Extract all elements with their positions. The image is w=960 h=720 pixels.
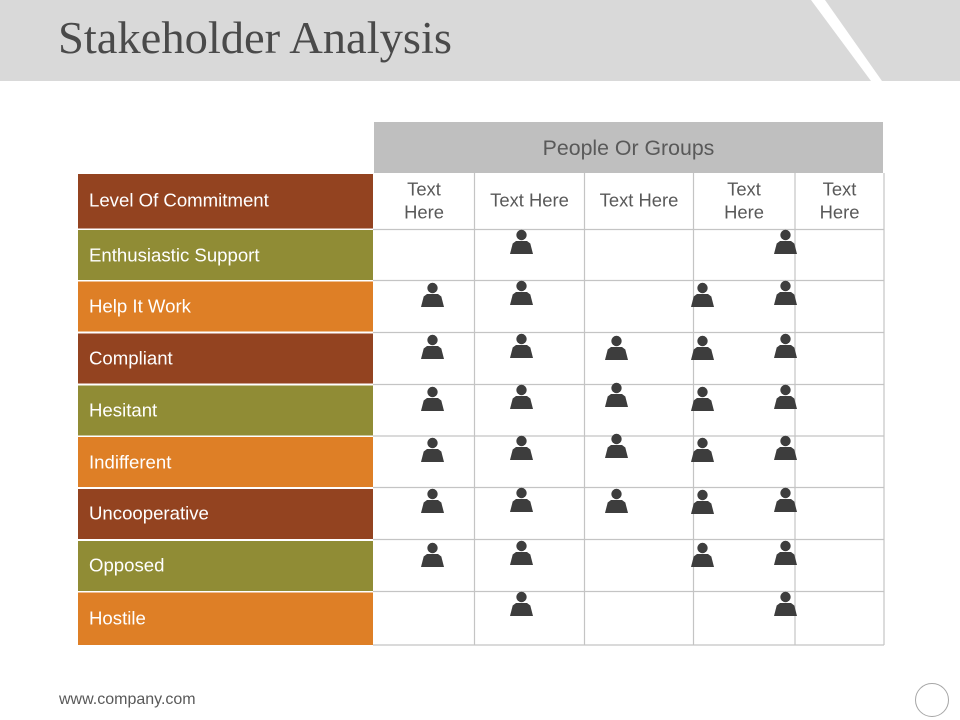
row labels: Indifferent (89, 452, 172, 472)
table grid (373, 173, 884, 645)
column headings (404, 178, 859, 222)
row labels (78, 174, 373, 645)
column headings: Text (407, 178, 441, 200)
row labels: Help It Work (89, 296, 192, 316)
row labels: Opposed (89, 554, 164, 576)
footer url: www.company.com (58, 691, 196, 708)
row labels: Hesitant (89, 400, 158, 420)
column headings: Text (727, 178, 761, 200)
column headings: Text Here (490, 190, 569, 210)
panel: people or groups header: People Or Groups (543, 136, 714, 160)
row labels: Uncooperative (89, 502, 209, 524)
title: Stakeholder Analysis (58, 13, 452, 63)
column headings: Here (404, 202, 444, 222)
column headings: Here (724, 202, 764, 222)
stakeholder icons (421, 230, 797, 616)
row labels: Compliant (89, 348, 174, 368)
panel: people or groups header (374, 122, 883, 173)
column headings: Text (823, 178, 856, 200)
row labels: Level Of Commitment (89, 190, 270, 210)
row labels: Enthusiastic Support (89, 244, 260, 266)
header band (0, 0, 960, 81)
row labels: Hostile (89, 608, 146, 628)
column headings: Text Here (600, 190, 678, 210)
column headings: Here (820, 202, 859, 222)
page number circle (916, 684, 948, 716)
